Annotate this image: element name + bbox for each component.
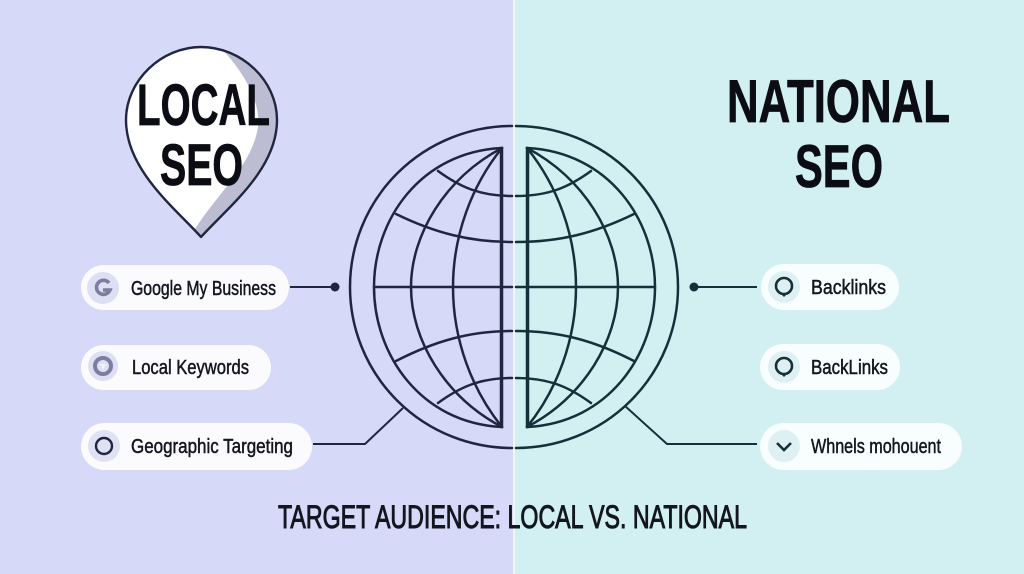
icon: location target [95, 358, 111, 374]
globe: right half [516, 126, 678, 448]
icon: G [97, 280, 110, 294]
pill: Local Keywords [81, 345, 271, 390]
connector: Backlinks to globe [690, 282, 757, 292]
icon: link ring [776, 278, 792, 297]
pill: Backlinks [761, 264, 899, 310]
pill: Google My Business: Google My Business [131, 278, 276, 300]
centre divider [513, 0, 515, 574]
connector: Geographic Targeting to globe [313, 408, 403, 444]
heading: Local SEO: SEO [160, 133, 243, 198]
pill: Backlinks: Backlinks [811, 277, 886, 299]
title: TARGET AUDIENCE: LOCAL VS. NATIONAL [278, 499, 747, 535]
heading: Local SEO: LOCAL [137, 73, 270, 138]
pill: Geographic Targeting: Geographic Targeting [131, 436, 293, 458]
pill: BackLinks: BackLinks [811, 357, 888, 379]
right panel background [514, 0, 1024, 574]
heading: Local SEO [137, 73, 270, 198]
left panel background [0, 0, 514, 574]
globe: left half [350, 126, 512, 448]
connector: Whnels pill to globe [625, 406, 757, 444]
connector: Google My Business to globe [290, 282, 340, 292]
pill: BackLinks [760, 344, 900, 390]
pill: Local Keywords: Local Keywords [132, 357, 249, 379]
pill: Geographic Targeting [81, 423, 312, 470]
pill: Whnels mohouent: Whnels mohouent [811, 436, 941, 458]
icon: ring [96, 438, 112, 454]
icon: link ring [776, 358, 792, 377]
heading: National SEO [727, 68, 950, 200]
heading: National SEO: NATIONAL [727, 68, 950, 135]
pill: Whnels mohouent [760, 423, 962, 470]
heading: National SEO: SEO [795, 133, 883, 200]
map pin: Local SEO [126, 47, 280, 240]
icon: chevron [777, 443, 791, 450]
pill: Google My Business [81, 265, 289, 310]
